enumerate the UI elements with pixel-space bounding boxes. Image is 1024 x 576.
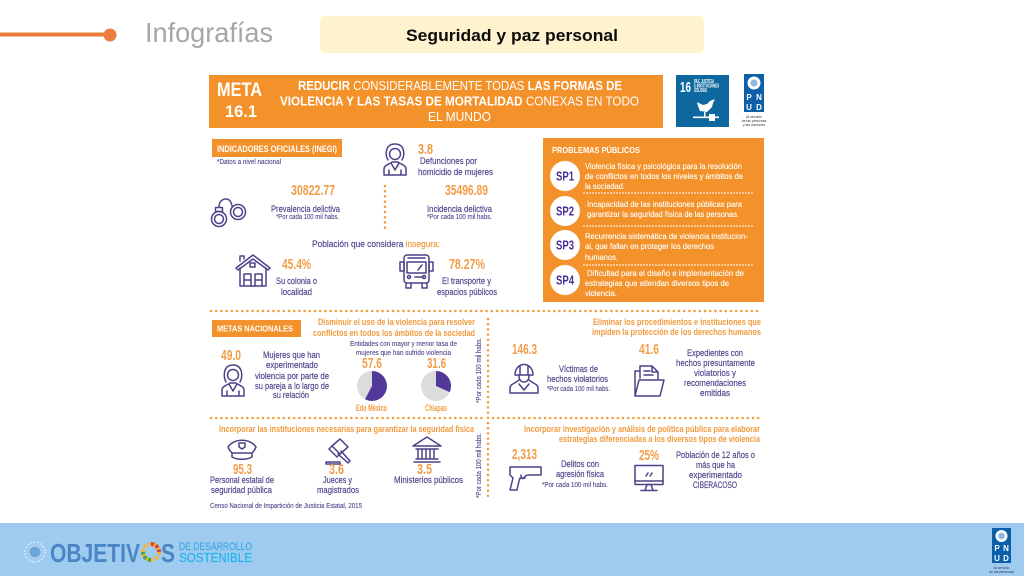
text: expedientes: emitidas	[700, 388, 730, 398]
text: víctimas: Víctimas de	[559, 364, 598, 374]
heading: eliminar procedimientos: impiden la protección de los derechos humanos	[592, 327, 761, 337]
icon: SDG 16: 16	[680, 79, 691, 96]
goal banner: EL MUNDO	[428, 110, 491, 124]
icon: PNUD logo: U	[746, 103, 752, 112]
note: entidades	[350, 341, 457, 357]
stat: ministerios	[394, 462, 463, 485]
icon: PNUD logo: de las personas	[742, 119, 767, 123]
logo text: Objetivos de Desarrollo Sostenible: DE DESARROLLO	[179, 541, 252, 553]
note: por cada 100 mil, rotated: *Por cada 100 mil habs.	[476, 338, 483, 403]
stat: jueces: magistrados	[317, 485, 359, 495]
stat: homicidio de mujeres: 3.8	[418, 142, 433, 158]
stat: personal estatal: 95.3	[233, 462, 252, 478]
heading: incorporar investigación: estrategias diferenciadas a los diversos tipos de violencia	[559, 434, 761, 444]
stat: 41.6: 41.6	[639, 342, 659, 358]
text: expedientes	[676, 348, 755, 398]
logo text: Objetivos de Desarrollo Sostenible: S	[161, 538, 175, 568]
stat: 25%: 25%	[639, 448, 659, 464]
text: ciberacoso: CIBERACOSO	[693, 480, 737, 490]
goal banner: META	[217, 80, 262, 101]
icon: handcuffs	[212, 199, 246, 226]
text: expedientes: hechos presuntamente	[676, 358, 755, 368]
icon: SDG 16	[676, 75, 729, 127]
pie chart: Edo México: 57.6	[362, 356, 382, 372]
stat: 49.0: 49.0	[221, 348, 241, 364]
text: delitos: agresión física	[556, 469, 604, 479]
stat: ministerios: 3.5	[417, 462, 432, 478]
SP4: Dificultad para el diseño e implementación de	[587, 268, 744, 278]
text: víctimas: hechos violatorios	[547, 374, 608, 384]
icon: PNUD logo	[742, 74, 767, 127]
text: mujeres violencia: su pareja a lo largo de	[255, 381, 329, 391]
heading: incorporar investigación: Incorporar investigación y análisis de política pública para elaborar	[524, 424, 760, 434]
text: mujeres violencia: Mujeres que han	[263, 350, 320, 360]
goal banner: 16.1	[225, 102, 257, 121]
SP4: SP4	[556, 272, 575, 288]
icon: temple	[413, 437, 441, 462]
icon: PNUD logo footer: P	[994, 544, 1000, 553]
icon: bus	[400, 255, 433, 288]
stat: personal estatal: seguridad pública	[211, 485, 272, 495]
stat: 146.3: 146.3	[512, 342, 537, 358]
text: mujeres violencia: experimentado	[266, 360, 318, 370]
heading: disminuir violencia: Disminuir el uso de la violencia para resolver	[318, 317, 475, 327]
icon: PNUD logo footer: N	[1003, 544, 1009, 553]
SP4: violencia.	[585, 288, 617, 298]
text: ciberacoso: Población de 12 años o	[676, 450, 755, 460]
icon: PNUD logo footer: Al servicio	[994, 566, 1010, 570]
stat: colonia: Su colonia o	[276, 276, 317, 286]
icon: PNUD logo footer	[989, 528, 1014, 574]
text: expedientes: Expedientes con	[687, 348, 743, 358]
stat: incidencia delictiva	[427, 183, 492, 221]
stat: homicidio de mujeres: Defunciones por	[420, 156, 477, 166]
icon: PNUD logo footer: D	[1003, 554, 1009, 563]
pie chart: Chiapas	[421, 356, 451, 413]
header label: Infografías: Infografías	[145, 17, 273, 48]
icon: gavel	[326, 439, 350, 464]
goal banner: VIOLENCIA Y LAS TASAS DE MORTALIDAD CONEXAS EN TODO	[280, 94, 639, 108]
text: delitos	[542, 459, 608, 489]
note: entidades: mujeres que han sufrido violencia	[356, 350, 451, 357]
text: víctimas: *Por cada 100 mil habs.	[547, 386, 610, 393]
icon: hooded victim	[510, 364, 538, 393]
heading: eliminar procedimientos	[592, 317, 761, 337]
SP1: SP1	[556, 168, 574, 184]
stat: colonia: 45.4%	[282, 257, 311, 273]
stat: incidencia delictiva: Incidencia delictiva	[427, 204, 492, 214]
heading: disminuir violencia	[313, 317, 475, 338]
icon: PNUD logo: N	[756, 93, 762, 102]
stat: prevalencia delictiva: Prevalencia delictiva	[271, 204, 340, 214]
logo text: Objetivos de Desarrollo Sostenible: OBJETIV	[50, 538, 141, 568]
icon: SDG 16: E INSTITUCIONES	[694, 84, 719, 90]
SP2: Incapacidad de las instituciones públicas para	[587, 199, 742, 209]
heading: eliminar procedimientos: Eliminar los procedimientos e instituciones que	[593, 317, 761, 327]
icon: PNUD logo: Al servicio	[746, 115, 762, 119]
stat: personal estatal	[210, 462, 274, 495]
footer band	[0, 523, 1024, 576]
icon: house	[236, 255, 270, 286]
note: entidades: Entidades con mayor y menor tasa de	[350, 341, 457, 348]
SP1	[550, 161, 743, 191]
text: delitos: Delitos con	[561, 459, 599, 469]
stat: prevalencia delictiva	[271, 183, 340, 221]
text: mujeres violencia: su relación	[273, 390, 309, 400]
stat: jueces	[317, 462, 359, 495]
goal banner: REDUCIR CONSIDERABLEMENTE TODAS LAS FORMAS DE	[298, 79, 622, 93]
stat: transporte: 78.27%	[449, 257, 485, 273]
icon: SDG 16: PAZ, JUSTICIA	[694, 79, 714, 85]
text: víctimas	[547, 364, 610, 393]
label: metas nacionales	[212, 320, 301, 337]
note: datos a nivel nacional: *Datos a nivel nacional	[217, 159, 281, 166]
logo text: Objetivos de Desarrollo Sostenible	[50, 538, 252, 568]
heading: incorporar investigación	[524, 424, 761, 444]
title box	[320, 16, 704, 53]
icon: handgun	[510, 467, 541, 490]
goal banner	[209, 75, 663, 128]
label: metas nacionales: METAS NACIONALES	[217, 324, 293, 334]
SP3: SP3	[556, 238, 574, 252]
pie chart: Chiapas: 31.6	[427, 356, 446, 372]
SP1: la sociedad.	[585, 181, 625, 191]
text: ciberacoso: más que ha	[696, 460, 735, 470]
text: ciberacoso	[676, 450, 755, 490]
SP2	[550, 196, 742, 226]
SP3: humanos.	[585, 252, 618, 262]
SP1: Violencia física y psicológica para la resolución	[585, 161, 742, 171]
text: mujeres violencia: violencia por parte de	[255, 371, 329, 381]
icon: PNUD logo: D	[756, 103, 762, 112]
icon: SDG 16: SÓLIDAS	[694, 86, 707, 94]
stat: prevalencia delictiva: 30822.77	[291, 183, 335, 199]
stat: colonia	[276, 257, 317, 297]
infographic	[200, 66, 780, 516]
stat: incidencia delictiva: *Por cada 100 mil habs.	[427, 214, 492, 221]
note: por cada 100 mil, rotated: *Por cada 100 mil habs.	[476, 433, 483, 498]
SP3	[550, 230, 748, 262]
stat: transporte	[437, 257, 497, 297]
text: ciberacoso: experimentado	[689, 470, 742, 480]
stat: jueces: Jueces y	[323, 475, 352, 485]
SP3: al, que fallan en proteger los derechos	[585, 241, 714, 251]
stat: transporte: El transporte y	[442, 276, 491, 286]
SP4	[550, 265, 744, 298]
SP1: de conflictos en todos los niveles y ámbitos de	[585, 171, 743, 181]
stat: transporte: espacios públicos	[437, 287, 497, 297]
SP4: estrategias que atiendan diversos tipos de	[585, 278, 729, 288]
stat: prevalencia delictiva: *Por cada 100 mil habs.	[276, 214, 339, 221]
heading: incorporar instituciones: Incorporar las instituciones necesarias para garantizar la seguridad física	[219, 424, 475, 434]
icon: police cap	[228, 440, 256, 459]
text: delitos: *Por cada 100 mil habs.	[542, 482, 608, 489]
icon: PNUD logo footer: U	[994, 554, 1000, 563]
label: indicadores oficiales: INDICADORES OFICIALES (INEGI)	[217, 144, 337, 154]
icon: PNUD logo: P	[746, 93, 752, 102]
header line with dot	[0, 28, 116, 42]
stat: homicidio de mujeres: homicidio de mujeres	[418, 167, 493, 177]
text: expedientes: violatorios y	[694, 368, 736, 378]
pie chart: Chiapas: Chiapas	[425, 403, 447, 413]
SP2: garantizar la seguridad física de las personas.	[587, 209, 739, 219]
SP3: Recurrencia sistemática de violencia institucion-	[585, 231, 748, 241]
text: mujeres violencia	[255, 350, 329, 400]
icon: folder	[635, 366, 664, 396]
stat: 2,313: 2,313	[512, 447, 537, 463]
pie chart: Edo México: Edo México	[356, 403, 387, 413]
icon: PNUD logo footer: de las personas	[989, 570, 1014, 574]
title box: Seguridad y paz personal	[406, 26, 618, 45]
icon: PNUD logo: y las naciones	[743, 123, 765, 127]
panel: problemas públicos	[543, 138, 764, 302]
pie chart: Edo México	[356, 356, 387, 413]
heading: disminuir violencia: conflictos en todos los ámbitos de la sociedad	[313, 328, 475, 338]
text: expedientes: recomendaciones	[684, 378, 746, 388]
stat: incidencia delictiva: 35496.89	[445, 183, 488, 199]
label: indicadores oficiales	[212, 139, 342, 157]
stat: ministerios: Ministerios públicos	[394, 475, 463, 485]
icon: woman	[384, 144, 406, 175]
icon: UN emblem	[25, 542, 45, 562]
source note: Censo Nacional de Impartición de Justicia Estatal, 2015	[210, 503, 362, 510]
stat: colonia: localidad	[281, 287, 312, 297]
icon: monitor	[635, 466, 663, 490]
icon: woman	[222, 365, 244, 396]
heading: población insegura: Población que considera insegura:	[312, 239, 440, 249]
panel: problemas públicos: PROBLEMAS PÚBLICOS	[552, 144, 640, 155]
stat: homicidio de mujeres	[418, 142, 493, 177]
logo text: Objetivos de Desarrollo Sostenible: SOSTENIBLE	[179, 550, 252, 565]
stat: jueces: 3.6	[329, 462, 344, 478]
SP2: SP2	[556, 204, 574, 218]
stat: personal estatal: Personal estatal de	[210, 475, 274, 485]
